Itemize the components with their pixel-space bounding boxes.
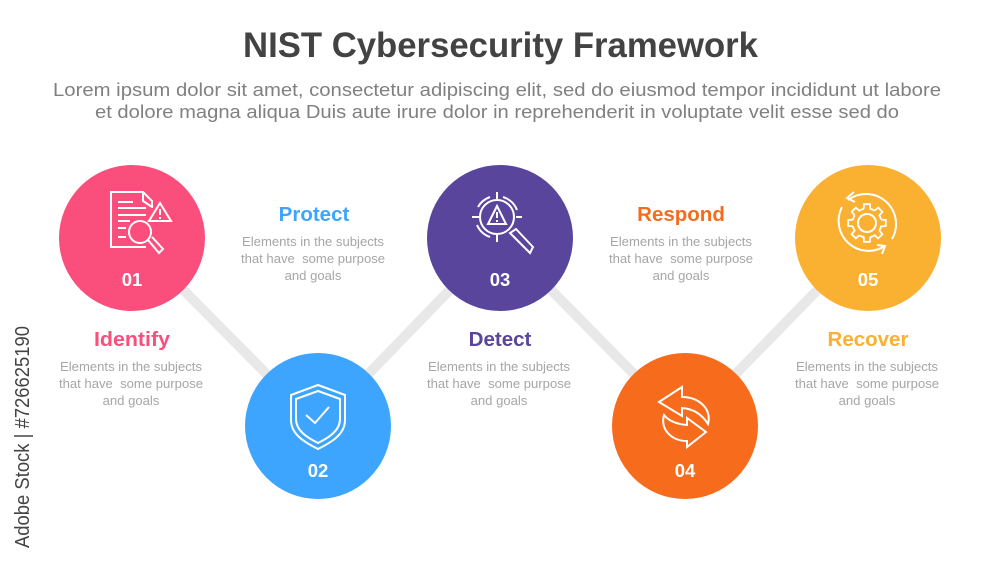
number 04: 04 — [675, 460, 696, 481]
step 03: detect — [427, 165, 573, 311]
text block: identify: Elements in the subjects — [60, 359, 202, 374]
icon: two swap arrows — [659, 387, 709, 447]
number 02: 02 — [308, 460, 328, 481]
text block: respond: that have some purpose — [609, 251, 753, 266]
text block: identify: Identify — [94, 328, 171, 351]
icon: shield with check — [291, 385, 345, 449]
text block: detect: and goals — [471, 393, 528, 408]
text block: detect: that have some purpose — [427, 376, 571, 391]
text block: respond: Elements in the subjects — [610, 234, 752, 249]
step 02: protect — [245, 353, 391, 499]
text block: recover: Recover — [828, 328, 908, 351]
text block: protect: Protect — [279, 203, 349, 226]
text block: recover: that have some purpose — [795, 376, 939, 391]
text block: protect: and goals — [285, 268, 342, 283]
text block: recover: and goals — [839, 393, 896, 408]
icon: document with magnifier and warning — [111, 192, 171, 253]
text block: detect: Detect — [469, 328, 531, 351]
text block: identify: that have some purpose — [59, 376, 203, 391]
text block: recover: Elements in the subjects — [796, 359, 938, 374]
title: NIST Cybersecurity Framework — [243, 26, 759, 65]
text block: identify: and goals — [103, 393, 160, 408]
step 04: respond — [612, 353, 758, 499]
icon: gear with circular arrows — [839, 192, 896, 254]
number 01: 01 — [122, 269, 142, 290]
text block: identify — [59, 328, 203, 408]
text block: respond: Respond — [637, 203, 725, 226]
text block: detect — [427, 328, 571, 408]
icon: target magnifier with warning — [472, 192, 533, 253]
subtitle text: et dolore magna aliqua Duis aute irure dolor in reprehenderit in voluptate velit esse sed do — [95, 101, 899, 122]
text block: protect: Elements in the subjects — [242, 234, 384, 249]
step 05: recover — [795, 165, 941, 311]
step 01: identify — [59, 165, 205, 311]
text block: recover — [795, 328, 939, 408]
connector lines — [132, 238, 868, 426]
subtitle text — [53, 79, 941, 122]
text block: respond — [609, 203, 753, 283]
number 03: 03 — [490, 269, 510, 290]
watermark: stock id: Adobe Stock | #726625190 — [12, 326, 34, 548]
number 05: 05 — [858, 269, 878, 290]
text block: protect — [241, 203, 385, 283]
text block: detect: Elements in the subjects — [428, 359, 570, 374]
text block: protect: that have some purpose — [241, 251, 385, 266]
subtitle text: Lorem ipsum dolor sit amet, consectetur adipiscing elit, sed do eiusmod tempor incididunt ut labore — [53, 79, 941, 100]
text block: respond: and goals — [653, 268, 710, 283]
